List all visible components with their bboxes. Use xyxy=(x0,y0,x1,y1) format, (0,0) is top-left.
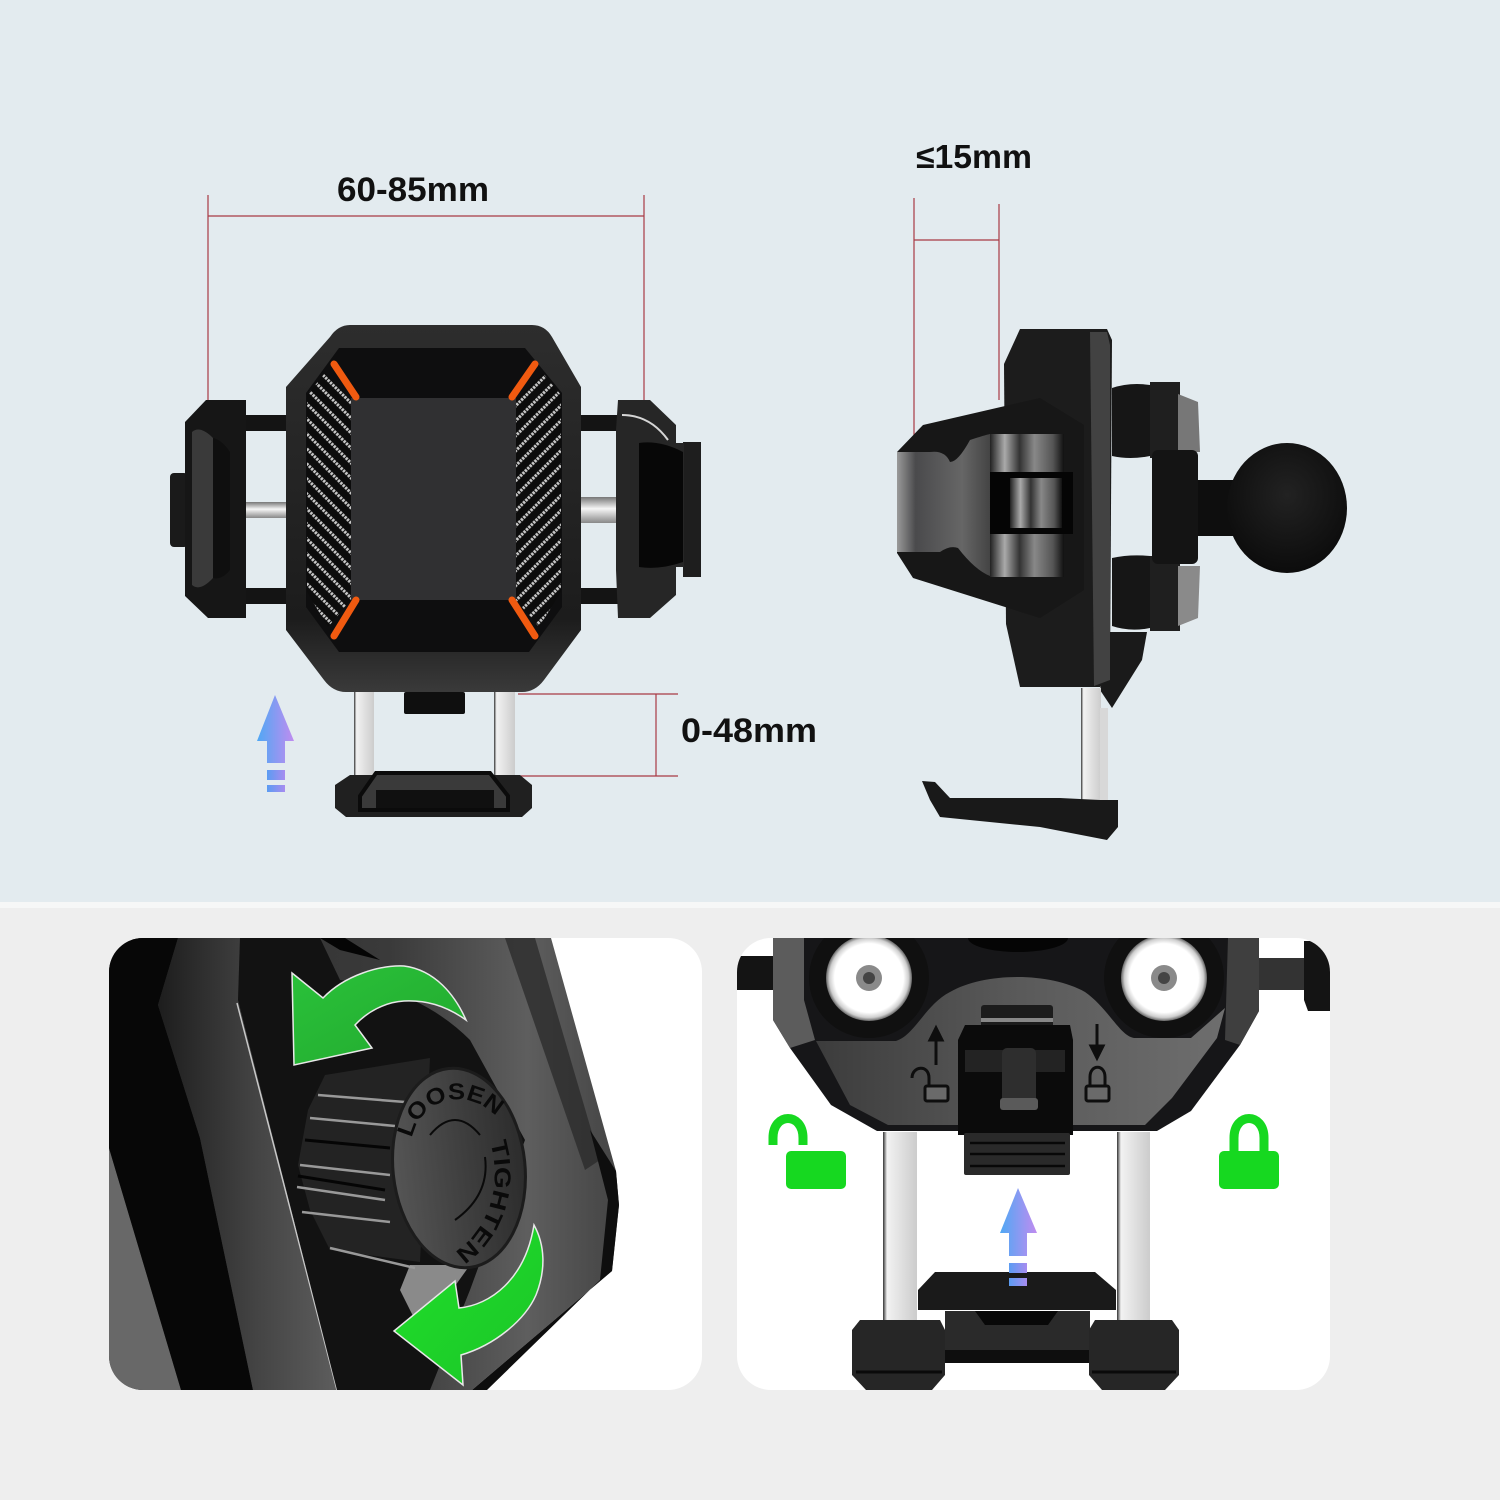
inner face xyxy=(306,348,562,652)
lower left grey wedge xyxy=(109,1148,181,1390)
wedge below plate xyxy=(1100,632,1147,708)
phone holder: side view xyxy=(897,329,1347,840)
knob cap: LOOSEN xyxy=(397,1083,504,1136)
body lower plate xyxy=(816,977,1225,1125)
bolt right xyxy=(1104,938,1224,1036)
small lock icon xyxy=(1086,1024,1109,1101)
knob recess xyxy=(238,938,525,1390)
side bars xyxy=(737,941,1330,1011)
right grey strip xyxy=(1225,938,1259,1045)
blue up arrow left xyxy=(257,695,294,792)
dimension: 15mm thickness: ≤15mm xyxy=(916,138,1032,175)
background: bottom section xyxy=(0,902,1500,1500)
dimension: 60-85mm width xyxy=(208,171,644,412)
rod xyxy=(1081,688,1108,800)
left grey strip xyxy=(773,938,815,1048)
screw assembly bottom xyxy=(1112,555,1200,631)
orange accents xyxy=(334,364,535,636)
ball xyxy=(1227,443,1347,573)
grey band xyxy=(158,938,337,1390)
foot xyxy=(922,781,1118,840)
icon: locked green xyxy=(1219,1118,1279,1189)
bottom foot xyxy=(335,775,532,817)
screw assembly top xyxy=(1112,382,1200,458)
horizontal rails xyxy=(244,415,620,604)
left side clamp xyxy=(170,400,246,618)
blue up arrow xyxy=(1000,1188,1037,1286)
knob cap: TIGHTEN xyxy=(456,1138,511,1264)
center pad xyxy=(351,398,516,600)
white edge line xyxy=(237,1003,337,1390)
foot xyxy=(852,1311,1179,1390)
background: top section xyxy=(0,0,1500,902)
clip face xyxy=(897,434,990,576)
holder body xyxy=(286,325,581,692)
carbon fibre left xyxy=(307,373,351,627)
lower wedge xyxy=(400,1265,467,1315)
clip housing xyxy=(897,398,1084,618)
phone holder: front view xyxy=(170,325,701,817)
dimension: 0-48mm height: 0-48mm xyxy=(681,712,817,750)
small unlock icon xyxy=(912,1028,948,1101)
bottom tab xyxy=(404,692,465,714)
back plate light strip xyxy=(1090,332,1110,686)
grey body xyxy=(109,938,619,1390)
top center recess xyxy=(968,938,1068,952)
body xyxy=(773,938,1259,1131)
rods xyxy=(883,1132,1150,1322)
upper recess highlight xyxy=(320,938,380,960)
knob ribs xyxy=(297,1058,430,1268)
vertical plate xyxy=(1152,450,1198,564)
dimension: 0-48mm height xyxy=(518,694,817,776)
right dark edge xyxy=(472,1130,619,1390)
dimension: 15mm thickness xyxy=(914,138,1032,435)
foot opening xyxy=(360,773,508,810)
back plate xyxy=(1004,329,1112,687)
bottom rods xyxy=(354,688,515,780)
green arrow bottom xyxy=(394,1225,543,1385)
knob cap xyxy=(394,1067,527,1270)
hinge xyxy=(990,434,1064,577)
dark body stripe xyxy=(505,938,600,1170)
right side clamp xyxy=(616,400,701,618)
icon: unlocked green xyxy=(773,1118,846,1189)
bolt left xyxy=(809,938,929,1036)
panel: lock detail xyxy=(737,918,1330,1390)
latch xyxy=(990,472,1073,534)
dimension: 60-85mm width: 60-85mm xyxy=(337,171,489,209)
carbon fibre right xyxy=(516,373,561,627)
foot tray xyxy=(918,1272,1116,1310)
panel: knob detail xyxy=(109,938,702,1390)
black band xyxy=(109,938,253,1390)
latch xyxy=(958,1005,1073,1175)
latch roller xyxy=(1010,478,1062,528)
ball joint stem xyxy=(1190,480,1234,536)
green arrow top xyxy=(292,966,466,1065)
